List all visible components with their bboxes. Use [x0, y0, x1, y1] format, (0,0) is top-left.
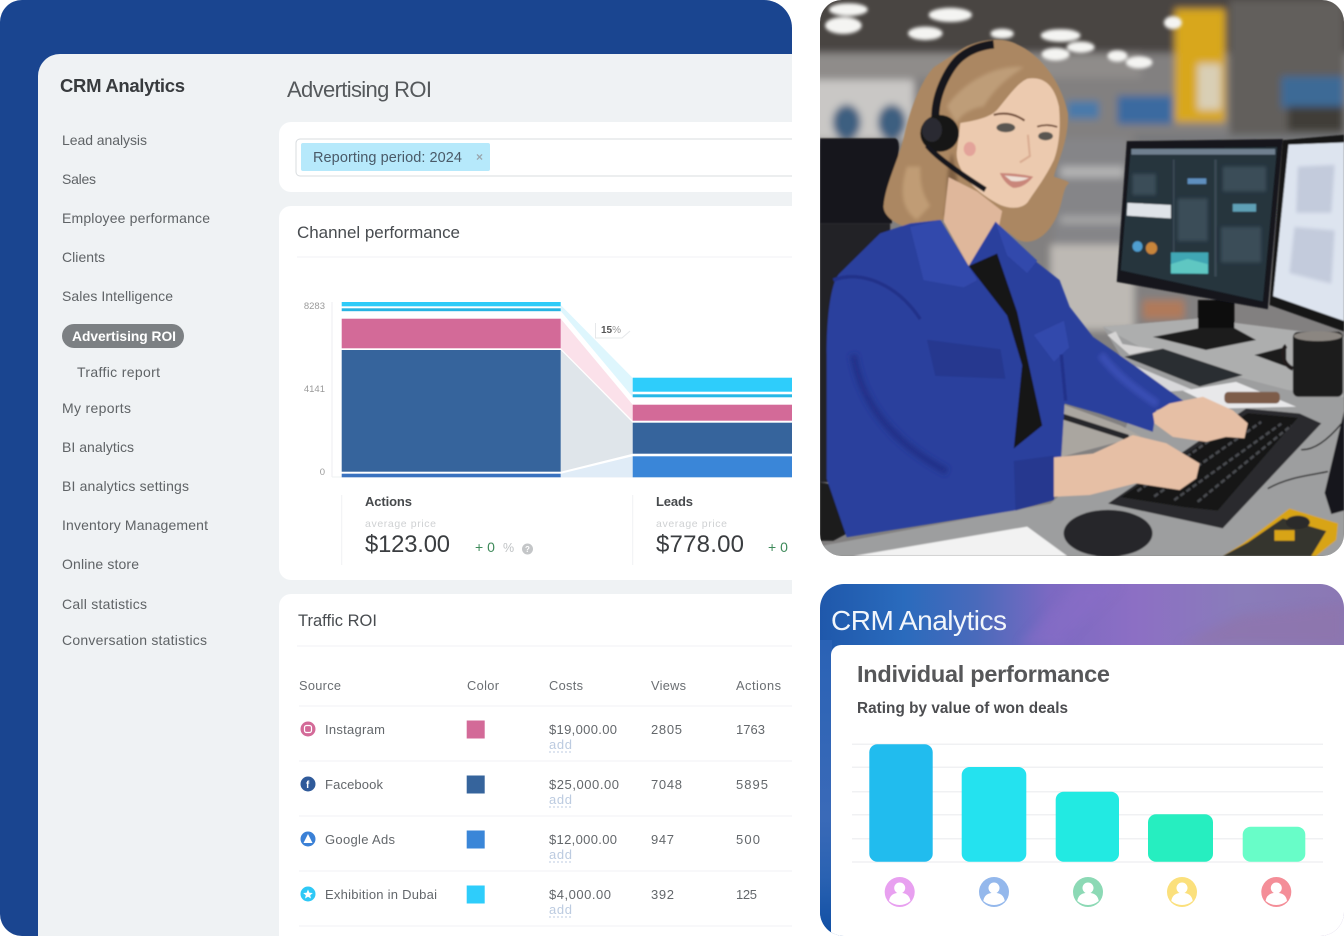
sidebar title: CRM Analytics: [60, 75, 185, 96]
card title on banner: CRM Analytics: [831, 605, 1007, 636]
row: Instagram: add: [549, 737, 572, 752]
metric: leads: + 0: [768, 539, 788, 555]
menu items: Clients: [62, 249, 105, 265]
traffic heading: Traffic ROI: [298, 612, 377, 630]
menu items: BI analytics settings: [62, 478, 189, 494]
row: Google Ads: 947: [651, 832, 674, 847]
hands: [1054, 397, 1248, 497]
table header: Costs: [549, 678, 583, 693]
row: Facebook: add: [549, 792, 572, 807]
row: Facebook: f: [306, 780, 310, 791]
row: Instagram: $19,000.00: [549, 722, 617, 737]
callout: 15%: [596, 323, 630, 338]
monitor edge and cables: [1268, 411, 1344, 514]
filter chip: Reporting period: 2024: [313, 150, 462, 166]
chair: [820, 138, 899, 541]
row: Facebook: [300, 776, 768, 807]
panel: reporting period filter: [279, 122, 792, 192]
metric: actions: + 0: [475, 539, 495, 555]
mouse: [1064, 510, 1153, 557]
channel heading: Channel performance: [297, 223, 460, 242]
row: Exhibition in Dubai: 392: [651, 887, 674, 902]
face: [957, 78, 1060, 208]
panel: traffic ROI: [279, 594, 792, 936]
row: Facebook: 7048: [651, 777, 682, 792]
menu items: [62, 132, 210, 648]
funnel chart: 4141: [304, 384, 325, 395]
menu items: My reports: [62, 400, 131, 416]
sidebar navigation: [60, 75, 210, 648]
table header: [300, 680, 780, 690]
metric: leads: $778.00: [656, 531, 744, 558]
metric: leads: average price: [656, 518, 727, 530]
notebook: [853, 527, 1067, 556]
desk: [820, 318, 1344, 556]
funnel chart: [304, 301, 793, 478]
jacket: [827, 220, 1185, 537]
filter chip: ×: [476, 150, 483, 164]
menu items: Employee performance: [62, 210, 210, 226]
row: Facebook: 5895: [736, 777, 768, 792]
card heading: Individual performance: [857, 661, 1110, 687]
row: Facebook: Facebook: [325, 777, 384, 792]
table header: Color: [467, 678, 500, 693]
menu items: Sales: [62, 171, 96, 187]
menu items: Advertising ROI: [72, 329, 176, 344]
metric: actions: Actions: [365, 494, 412, 509]
row: Exhibition in Dubai: $4,000.00: [549, 887, 611, 902]
photo: operator with headset at CRM workstation: [807, 0, 1344, 571]
row: Google Ads: [300, 830, 760, 862]
menu items: Traffic report: [77, 364, 160, 380]
menu items: Conversation statistics: [62, 632, 207, 648]
page heading: Advertising ROI: [287, 77, 432, 102]
row: Exhibition in Dubai: add: [549, 902, 572, 917]
ceiling lights: [825, 3, 1182, 68]
card subheading: Rating by value of won deals: [857, 700, 1068, 717]
metric: actions: %: [503, 541, 514, 555]
panel: channel performance: [279, 206, 793, 580]
menu items: Inventory Management: [62, 517, 208, 533]
metric: actions: $123.00: [365, 531, 450, 558]
filter chip: [301, 143, 490, 171]
second monitor: [1254, 135, 1344, 367]
callout: 15%: 15%: [601, 325, 621, 336]
mug: [1283, 331, 1343, 397]
black shirt: [969, 254, 1042, 449]
table header: Views: [651, 678, 686, 693]
metric: leads: Leads: [656, 494, 693, 509]
row: Google Ads: 500: [736, 832, 760, 847]
hair: [883, 40, 1069, 242]
row: Google Ads: $12,000.00: [549, 832, 617, 847]
row: Google Ads: Google Ads: [325, 832, 396, 847]
first monitor: [1117, 139, 1283, 350]
menu items: Call statistics: [62, 596, 147, 612]
table header: Actions: [736, 678, 781, 693]
small keyboard and papers: [1107, 332, 1296, 408]
main keyboard: [1108, 408, 1321, 528]
row: Exhibition in Dubai: [300, 886, 757, 917]
row: Exhibition in Dubai: 125: [736, 887, 757, 902]
funnel chart: 0: [320, 467, 325, 478]
row: Google Ads: add: [549, 847, 572, 862]
funnel chart: 8283: [304, 301, 325, 312]
metric: actions: [342, 494, 533, 565]
metric: leads: [633, 494, 788, 565]
row: Instagram: 1763: [736, 722, 765, 737]
metric: actions: average price: [365, 518, 436, 530]
row: Instagram: 2805: [651, 722, 682, 737]
neck: [944, 177, 1002, 266]
metric: actions: ?: [525, 545, 530, 554]
table header: Source: [299, 678, 341, 693]
handheld device: [1223, 508, 1338, 556]
menu items: BI analytics: [62, 439, 134, 455]
factory background: [807, 0, 1344, 571]
headset: [920, 44, 994, 190]
menu items: Online store: [62, 556, 139, 572]
bar chart: [852, 744, 1323, 862]
row: Instagram: Instagram: [325, 722, 385, 737]
menu items: Sales Intelligence: [62, 288, 173, 304]
row: Instagram: [300, 720, 765, 752]
menu items: Lead analysis: [62, 132, 147, 148]
row: Exhibition in Dubai: Exhibition in Dubai: [325, 887, 437, 902]
facial features: [964, 114, 1057, 188]
panel: CRM dashboard: [0, 0, 793, 936]
table: [299, 678, 792, 926]
row: Facebook: $25,000.00: [549, 777, 619, 792]
avatars: [885, 877, 1291, 907]
panel: individual performance card: [820, 584, 1344, 936]
